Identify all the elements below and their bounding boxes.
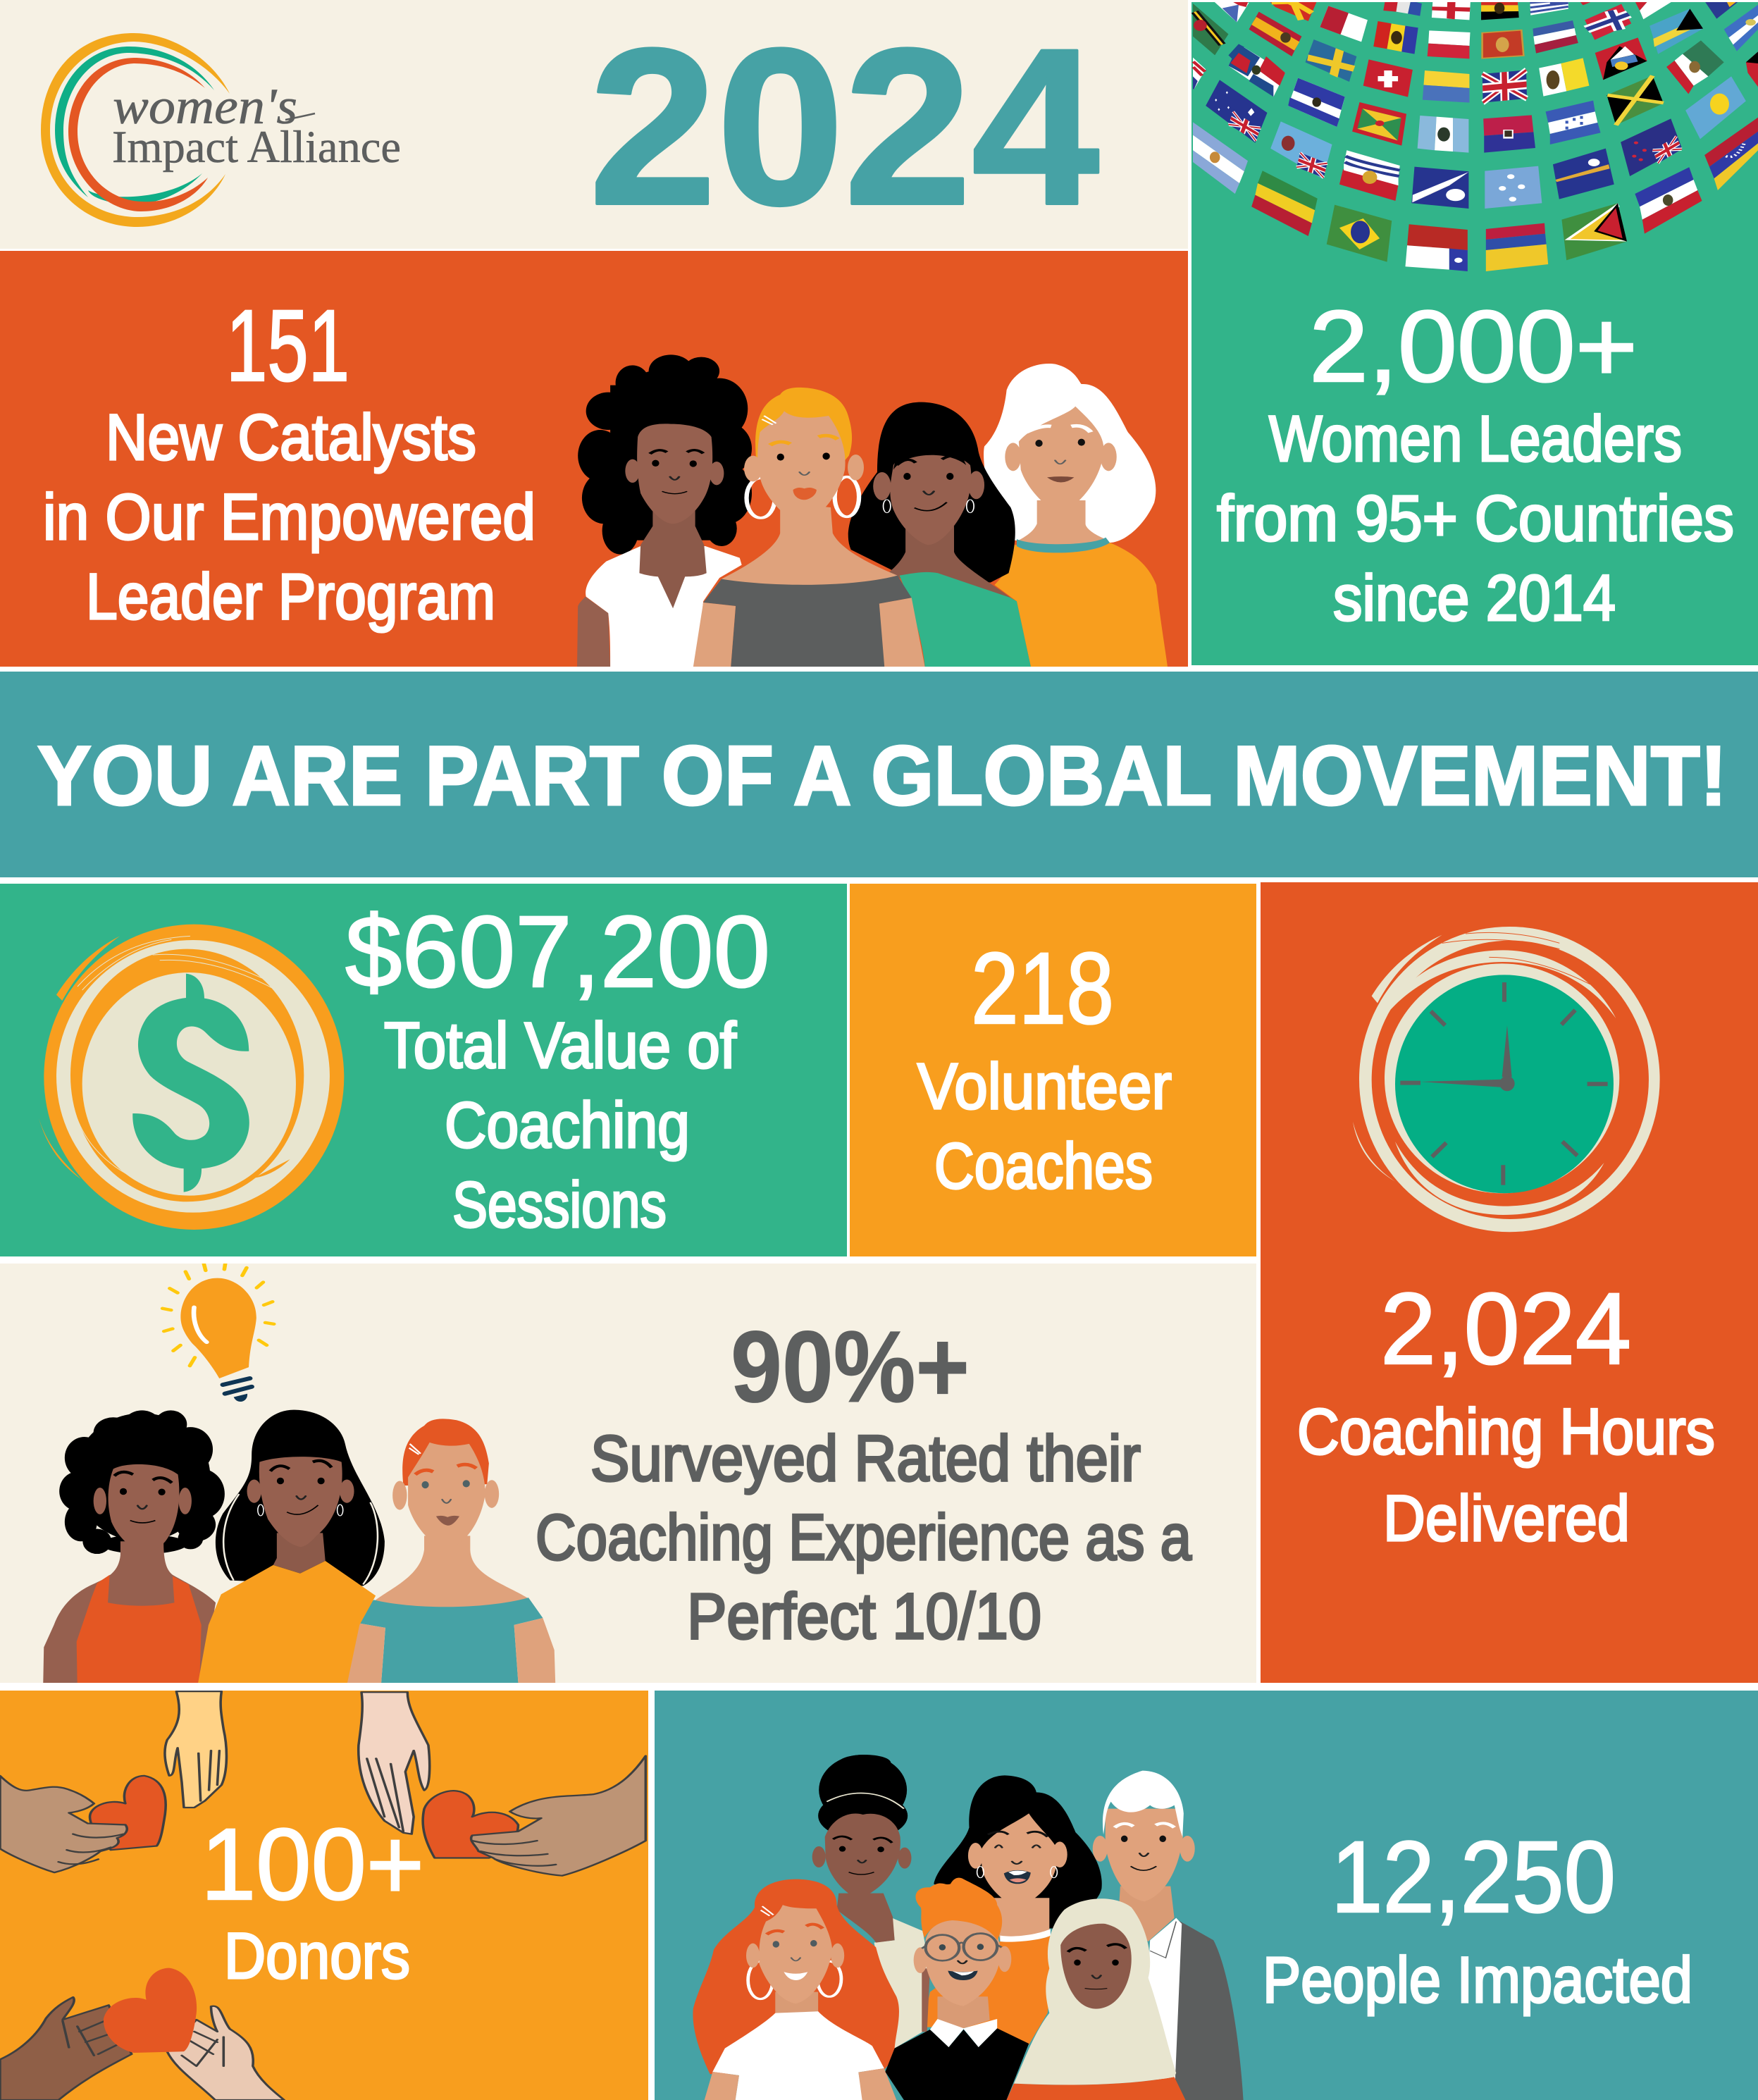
stat: 90%+ rating: Perfect 10/10 xyxy=(687,1581,1041,1653)
illustration: four women xyxy=(577,354,1168,667)
illustration: group of six people xyxy=(693,1755,1244,2100)
stat: 100+ donors xyxy=(201,1808,424,1992)
panel: coaching hours xyxy=(1261,882,1758,1683)
woman with long black hair and orange top xyxy=(922,1775,1102,2045)
stat: 151 new catalysts xyxy=(43,289,536,633)
stat: 151 new catalysts: New Catalysts xyxy=(106,402,476,474)
panel: volunteer coaches xyxy=(850,884,1256,1256)
woman with long black hair xyxy=(848,402,1031,667)
panel: flags and women leaders xyxy=(1191,0,1758,665)
year heading: 2024 xyxy=(589,2,1101,251)
stat: 2,024 coaching hours: Delivered xyxy=(1383,1483,1630,1555)
stat: $607,200 coaching value: $607,200 xyxy=(345,895,770,1008)
panel: volunteer coaches: Coaches xyxy=(934,1130,1153,1202)
illustration: three women and light bulb xyxy=(43,1261,555,1685)
stat: 2,024 coaching hours: Coaching Hours xyxy=(1297,1396,1715,1468)
icon: clock xyxy=(1353,927,1660,1232)
icon: dollar coin xyxy=(39,925,344,1230)
illustration: hands holding hearts xyxy=(0,1691,645,2100)
stat: 2,000+ women leaders: Women Leaders xyxy=(1269,403,1682,475)
woman with black curly hair xyxy=(577,354,752,667)
panel: coaching experience rating xyxy=(0,1261,1256,1685)
panel: donors xyxy=(0,1691,648,2100)
stat: 151 new catalysts: Leader Program xyxy=(86,561,495,633)
stat: 90%+ rating xyxy=(536,1310,1192,1653)
panel: volunteer coaches: 218 xyxy=(971,932,1114,1045)
woman wearing hijab xyxy=(1006,1898,1185,2100)
stat: 2,000+ women leaders: 2,000+ xyxy=(1309,290,1638,403)
stat: 90%+ rating: Coaching Experience as a xyxy=(536,1502,1192,1574)
logo: Women's Impact Alliance xyxy=(41,33,401,227)
stat: 2,024 coaching hours xyxy=(1297,1272,1715,1555)
stat: 2,000+ women leaders: since 2014 xyxy=(1333,562,1616,634)
stat: 100+ donors: 100+ xyxy=(201,1808,424,1921)
woman with black hair and yellow top xyxy=(198,1410,385,1685)
woman with red wavy hair xyxy=(693,1879,899,2100)
stat: 100+ donors: Donors xyxy=(224,1920,410,1992)
young man with glasses xyxy=(885,1878,1029,2100)
logo wordmark: Impact Alliance: Impact Alliance xyxy=(112,122,401,173)
stat: 12,250 people impacted: 12,250 xyxy=(1331,1820,1616,1934)
panel: people impacted xyxy=(655,1691,1758,2100)
stat: 90%+ rating: 90%+ xyxy=(731,1310,970,1423)
banner: global movement: YOU ARE PART OF A GLOBAL MOVEMENT! xyxy=(37,729,1727,823)
stat: 151 new catalysts: 151 xyxy=(226,289,349,402)
woman with white hair xyxy=(984,364,1168,667)
icon: light bulb xyxy=(163,1261,274,1402)
woman with curly hair and orange top xyxy=(43,1410,225,1685)
panel: logo and year header xyxy=(0,0,1188,251)
logo wordmark: women's: women's xyxy=(113,78,297,135)
man with white hair xyxy=(1093,1771,1244,2100)
stat: $607,200 coaching value: Coaching xyxy=(445,1089,690,1161)
illustration: world flags xyxy=(1193,0,1758,271)
panel: coaching value xyxy=(0,884,847,1256)
stat: 12,250 people impacted: People Impacted xyxy=(1263,1944,1692,2016)
panel: new catalysts xyxy=(0,251,1188,667)
stat: 2,000+ women leaders xyxy=(1217,290,1734,634)
stat: 2,000+ women leaders: from 95+ Countries xyxy=(1217,483,1734,555)
stat: 2,024 coaching hours: 2,024 xyxy=(1380,1272,1631,1385)
woman with blonde hair and hoops xyxy=(693,388,925,667)
woman with red hair and teal top xyxy=(347,1419,555,1685)
stat: $607,200 coaching value xyxy=(345,895,770,1241)
stat: 90%+ rating: Surveyed Rated their xyxy=(590,1423,1141,1495)
stat: 151 new catalysts: in Our Empowered xyxy=(43,481,536,553)
panel: volunteer coaches: Volunteer xyxy=(917,1051,1172,1123)
stat: $607,200 coaching value: Sessions xyxy=(452,1169,667,1241)
stat: $607,200 coaching value: Total Value of xyxy=(384,1010,736,1082)
banner: global movement xyxy=(0,672,1758,877)
stat: 12,250 people impacted xyxy=(1263,1820,1692,2016)
logo wordmark tail xyxy=(285,113,315,120)
woman with hair bun xyxy=(812,1755,930,2049)
